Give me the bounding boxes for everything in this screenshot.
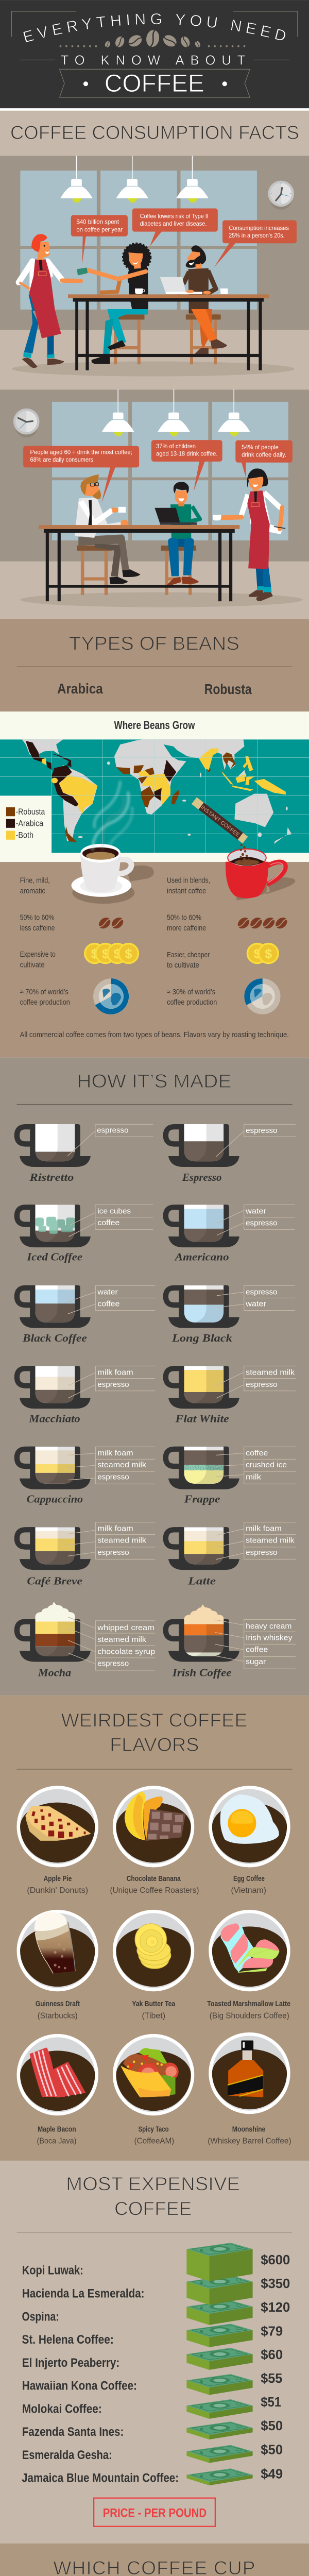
cup: ristretto: espresso — [97, 1126, 128, 1134]
cup: mocha: espresso — [97, 1659, 129, 1668]
cup: irish coffee: heavy cream — [246, 1622, 291, 1631]
cup: iced coffee: Iced Coffee — [26, 1251, 82, 1263]
callout: 37 percent of children — [151, 440, 222, 492]
icon: white coffee cup with steam — [72, 782, 154, 904]
cup: ristretto — [14, 1124, 153, 1181]
flavor: spicy taco: (CoffeeAM) — [134, 2137, 174, 2145]
price list: Kopi Luwak: — [22, 2264, 83, 2278]
cup: macchiato: milk foam — [97, 1369, 133, 1377]
cup: frappe: crushed ice — [246, 1461, 287, 1469]
flavor: guinness draft — [17, 1910, 98, 2020]
customer with glasses — [75, 474, 140, 584]
flavor: apple pie: (Dunkin' Donuts) — [27, 1886, 88, 1895]
cup: mocha — [17, 1602, 155, 1679]
flavor: maple bacon: Maple Bacon — [38, 2125, 76, 2133]
callout: 37 percent of children: aged 13-18 drink coffee. — [156, 450, 217, 457]
cup: flat white: steamed milk — [246, 1369, 295, 1377]
price list: Hawaiian Kona Coffee: — [22, 2380, 137, 2393]
cup: espresso: Espresso — [182, 1171, 221, 1183]
cup: latte — [163, 1522, 296, 1585]
icon: two coins: $ — [265, 947, 272, 961]
heading: most expensive coffee — [17, 2173, 292, 2232]
heading: weirdest coffee flavors: FLAVORS — [110, 1734, 199, 1755]
cup: irish coffee: sugar — [246, 1658, 266, 1666]
panel: most expensive coffee — [17, 2173, 292, 2527]
robusta attributes: Easier, cheaper — [167, 951, 210, 959]
flavor: moonshine: (Whiskey Barrel Coffee) — [208, 2137, 291, 2145]
cup: iced coffee: ice cubes — [97, 1207, 131, 1215]
heading: types of beans: TYPES OF BEANS — [69, 632, 239, 654]
icon: four coins — [84, 943, 139, 964]
callout: people aged 60: 68% are daily consumers. — [30, 456, 95, 463]
icon: hanging lamps — [60, 156, 209, 202]
cup: cafe breve: espresso — [97, 1549, 129, 1557]
heading: most expensive coffee: COFFEE — [114, 2198, 192, 2219]
map legend: -Both — [16, 830, 33, 840]
callout: people aged 60 — [23, 446, 139, 503]
stools — [114, 313, 221, 364]
arabica attributes: cultivate — [20, 960, 45, 969]
flavor: guinness draft: (Starbucks) — [38, 2011, 78, 2020]
icon: two coins: $ — [253, 947, 261, 961]
price list: $55 — [261, 2371, 282, 2386]
robusta attributes: ≈ 30% of world’s — [167, 988, 215, 996]
title line: to know about: TO KNOW ABOUT — [60, 54, 246, 68]
flavor: spicy taco — [113, 2034, 194, 2145]
arabica attributes — [20, 876, 139, 1014]
cup: long black: water — [245, 1300, 266, 1309]
cup: irish coffee: Irish Coffee — [172, 1666, 232, 1679]
price list: $60 — [261, 2348, 283, 2362]
icon: wall clock — [13, 409, 40, 437]
cup: irish coffee: coffee — [246, 1646, 268, 1654]
callout: 40 billion: on coffee per year — [76, 226, 123, 233]
flavor: egg coffee: Egg Coffee — [233, 1874, 265, 1883]
icon: four coins: $ — [125, 947, 132, 961]
title banner — [11, 11, 298, 98]
floor shadow — [12, 361, 295, 377]
arabica attributes: Fine, mild, — [20, 876, 50, 885]
student with laptop — [154, 482, 200, 587]
price list: $50 — [261, 2443, 283, 2457]
callout: consumption increases: 25% in a person's 20s. — [229, 232, 285, 239]
cup: cafe breve — [14, 1522, 156, 1587]
callout: type II diabetes: diabetes and liver disease. — [140, 220, 207, 227]
panel: types of beans — [0, 632, 309, 1039]
arabica attributes: ≈ 70% of world’s — [20, 988, 68, 996]
flavor: egg coffee — [209, 1786, 290, 1895]
cup: cappuccino: milk foam — [97, 1449, 133, 1458]
price list: Hacienda La Esmeralda: — [22, 2287, 144, 2301]
cup: cappuccino: espresso — [97, 1473, 129, 1481]
cup: black coffee: Black Coffee — [22, 1332, 87, 1344]
cup: latte: Latte — [187, 1574, 216, 1587]
flavor: maple bacon — [17, 2034, 98, 2145]
price list: Ospina: — [22, 2310, 59, 2324]
price list: $49 — [261, 2467, 283, 2481]
title line: coffee: COFFEE — [105, 70, 204, 97]
map legend: -Robusta — [16, 807, 45, 817]
cup: americano — [163, 1205, 295, 1260]
robusta attributes — [167, 876, 289, 1014]
cup: black coffee: water — [97, 1289, 118, 1297]
callout: 54 percent of people: 54% of people — [242, 444, 279, 451]
price list: $50 — [261, 2419, 283, 2433]
cup: macchiato: Macchiato — [28, 1413, 80, 1425]
label: arabica: Arabica — [57, 681, 103, 697]
customer with laptop — [160, 245, 228, 357]
cup: ristretto: Ristretto — [29, 1171, 74, 1183]
cup: cafe breve: milk foam — [97, 1525, 133, 1533]
price list: El Injerto Peaberry: — [22, 2357, 119, 2370]
robusta attributes: coffee production — [167, 998, 217, 1007]
icon: four coins: $ — [114, 947, 121, 961]
note box: price per pound — [94, 2498, 215, 2527]
chart: money stacks — [186, 2243, 253, 2485]
callout: 54 percent of people — [235, 440, 293, 478]
cup: long black: Long Black — [171, 1332, 232, 1344]
heading: most expensive coffee: MOST EXPENSIVE — [66, 2173, 240, 2195]
price list: $120 — [261, 2300, 290, 2315]
price list: $600 — [261, 2253, 290, 2267]
floor shadow — [20, 592, 303, 607]
cup: iced coffee — [14, 1205, 153, 1263]
icon: globe 70 percent — [93, 978, 129, 1014]
robusta attributes: instant coffee — [167, 887, 206, 895]
title line: everything you need: EVERYTHING YOU NEED — [23, 13, 285, 42]
map legend: -Arabica — [16, 819, 44, 828]
flavor: toasted marshmallow latte — [207, 1910, 290, 2020]
icon: four beans — [235, 915, 289, 931]
table — [39, 525, 239, 601]
flavor: egg coffee: (Vietnam) — [231, 1886, 266, 1895]
customer with money — [77, 244, 150, 364]
panel: where beans grow — [0, 711, 309, 862]
icon: two beans — [97, 915, 126, 931]
robusta attributes: 50% to 60% — [167, 913, 201, 922]
cup: cappuccino: Cappuccino — [27, 1493, 83, 1505]
cup: americano: espresso — [246, 1219, 277, 1228]
arabica attributes: coffee production — [20, 998, 70, 1007]
stools — [77, 546, 196, 595]
price list: St. Helena Coffee: — [22, 2333, 114, 2347]
callout: type II diabetes: Coffee lowers risk of Type II — [140, 213, 209, 220]
cup: cafe breve: steamed milk — [97, 1537, 147, 1545]
robusta attributes: more caffeine — [167, 924, 206, 933]
heading: how it's made: HOW IT’S MADE — [77, 1070, 232, 1092]
flavor: moonshine: Moonshine — [232, 2125, 265, 2133]
robusta attributes: to cultivate — [167, 961, 199, 970]
arabica attributes: less caffeine — [20, 924, 55, 933]
icon: wall clock — [268, 181, 294, 210]
cup: mocha: Mocha — [38, 1666, 71, 1679]
price list: $79 — [261, 2324, 283, 2338]
flavor: chocolate banana — [110, 1786, 199, 1895]
panel: where beans grow: Where Beans Grow — [114, 719, 195, 732]
flavor: chocolate banana: (Unique Coffee Roasters) — [110, 1886, 199, 1895]
callout: consumption increases — [214, 220, 297, 267]
icon: four coins: $ — [91, 947, 98, 961]
cup: long black: espresso — [246, 1289, 277, 1297]
note box: price per pound: PRICE - PER POUND — [103, 2506, 207, 2520]
map legend — [6, 807, 45, 840]
cup: latte: milk foam — [246, 1525, 282, 1533]
arabica attributes: Expensive to — [20, 950, 56, 959]
cup: espresso — [163, 1124, 296, 1183]
cup: cappuccino: steamed milk — [97, 1461, 147, 1469]
price list: Molokai Coffee: — [22, 2402, 102, 2416]
heading: weirdest coffee flavors — [17, 1709, 292, 1769]
cup: iced coffee: coffee — [97, 1219, 119, 1227]
cup: flat white: espresso — [246, 1381, 277, 1389]
callout: people aged 60: People aged 60 + drink the most coffee; — [30, 449, 132, 456]
flavor: maple bacon: (Boca Java) — [37, 2137, 76, 2145]
cup: latte: espresso — [246, 1549, 277, 1557]
flavor: yak butter tea: Yak Butter Tea — [132, 1999, 176, 2008]
cup: irish coffee — [166, 1604, 296, 1679]
cup: frappe: Frappe — [184, 1493, 220, 1505]
cup: latte: steamed milk — [246, 1537, 295, 1545]
cup: frappe: coffee — [246, 1449, 268, 1458]
barista — [19, 234, 81, 368]
cup: macchiato: espresso — [97, 1381, 129, 1389]
panel: cafe scene one — [12, 156, 297, 377]
flavor: apple pie: Apple Pie — [44, 1874, 72, 1883]
flavor: yak butter tea: (Tibet) — [142, 2011, 165, 2020]
panel: cafe scene two — [13, 389, 303, 607]
cup: black coffee: coffee — [97, 1300, 119, 1309]
arabica attributes: 50% to 60% — [20, 913, 54, 922]
callout: consumption increases: Consumption increases — [229, 225, 289, 232]
cup: mocha: whipped cream — [97, 1624, 154, 1632]
callout: 40 billion — [71, 215, 128, 264]
price list: $51 — [261, 2395, 281, 2410]
price list: Fazenda Santa Ines: — [22, 2426, 124, 2439]
table — [68, 294, 269, 370]
heading: weirdest coffee flavors: WEIRDEST COFFEE — [61, 1709, 247, 1731]
cup: cappuccino — [14, 1447, 156, 1505]
price list — [22, 2253, 290, 2485]
cup: americano: water — [245, 1207, 266, 1215]
icon: globe 30 percent — [244, 978, 281, 1014]
cup: macchiato — [14, 1365, 156, 1422]
price list: Esmeralda Gesha: — [22, 2449, 112, 2462]
cup: frappe — [163, 1447, 296, 1505]
world map — [0, 739, 309, 853]
icon: row of coffee beans — [104, 29, 201, 49]
cup: frappe: milk — [246, 1473, 262, 1481]
cup: flat white — [163, 1365, 296, 1422]
callout: type II diabetes — [132, 209, 218, 246]
cup: irish coffee: Irish whiskey — [246, 1634, 293, 1642]
cup: cafe breve: Café Breve — [27, 1574, 82, 1587]
flavor: toasted marshmallow latte: (Big Shoulders Coffee) — [210, 2011, 289, 2020]
flavor: moonshine — [208, 2032, 291, 2145]
cup: mocha: chocolate syrup — [97, 1648, 155, 1656]
cup: mocha: steamed milk — [97, 1636, 147, 1644]
callout: 40 billion: $40 billion spent — [76, 218, 119, 226]
robusta attributes: Used in blends, — [167, 876, 210, 885]
callout: 54 percent of people: drink coffee daily. — [242, 451, 286, 459]
cup: flat white: Flat White — [175, 1413, 229, 1425]
icon: two coins — [247, 943, 279, 964]
flavor: chocolate banana: Chocolate Banana — [127, 1874, 181, 1883]
icon: instant coffee stick and red mug: INSTANT COFFEE — [199, 805, 241, 838]
arabica attributes: aromatic — [20, 887, 45, 895]
price list: $350 — [261, 2277, 290, 2291]
icon: instant coffee stick and red mug — [192, 797, 295, 900]
cup: long black — [163, 1285, 295, 1344]
flavor: spicy taco: Spicy Taco — [139, 2125, 169, 2133]
icon: four coins: $ — [102, 947, 109, 961]
cup: espresso: espresso — [246, 1127, 277, 1135]
heading: coffee consumption facts: COFFEE CONSUMPTION FACTS — [10, 122, 299, 143]
cup: americano: Americano — [174, 1251, 229, 1263]
flavor: toasted marshmallow latte: Toasted Marshmallow Latte — [207, 1999, 290, 2008]
price list: Jamaica Blue Mountain Coffee: — [22, 2472, 179, 2485]
flavor: yak butter tea — [113, 1910, 194, 2020]
flavor: apple pie — [17, 1786, 98, 1895]
waitress — [213, 468, 285, 601]
icon: hanging lamps — [102, 389, 250, 436]
flavor: guinness draft: Guinness Draft — [36, 1999, 80, 2008]
cup: black coffee — [14, 1285, 156, 1344]
panel: how it's made — [17, 1070, 296, 1263]
label: robusta: Robusta — [204, 681, 252, 697]
callout: 37 percent of children: 37% of children — [156, 443, 196, 450]
